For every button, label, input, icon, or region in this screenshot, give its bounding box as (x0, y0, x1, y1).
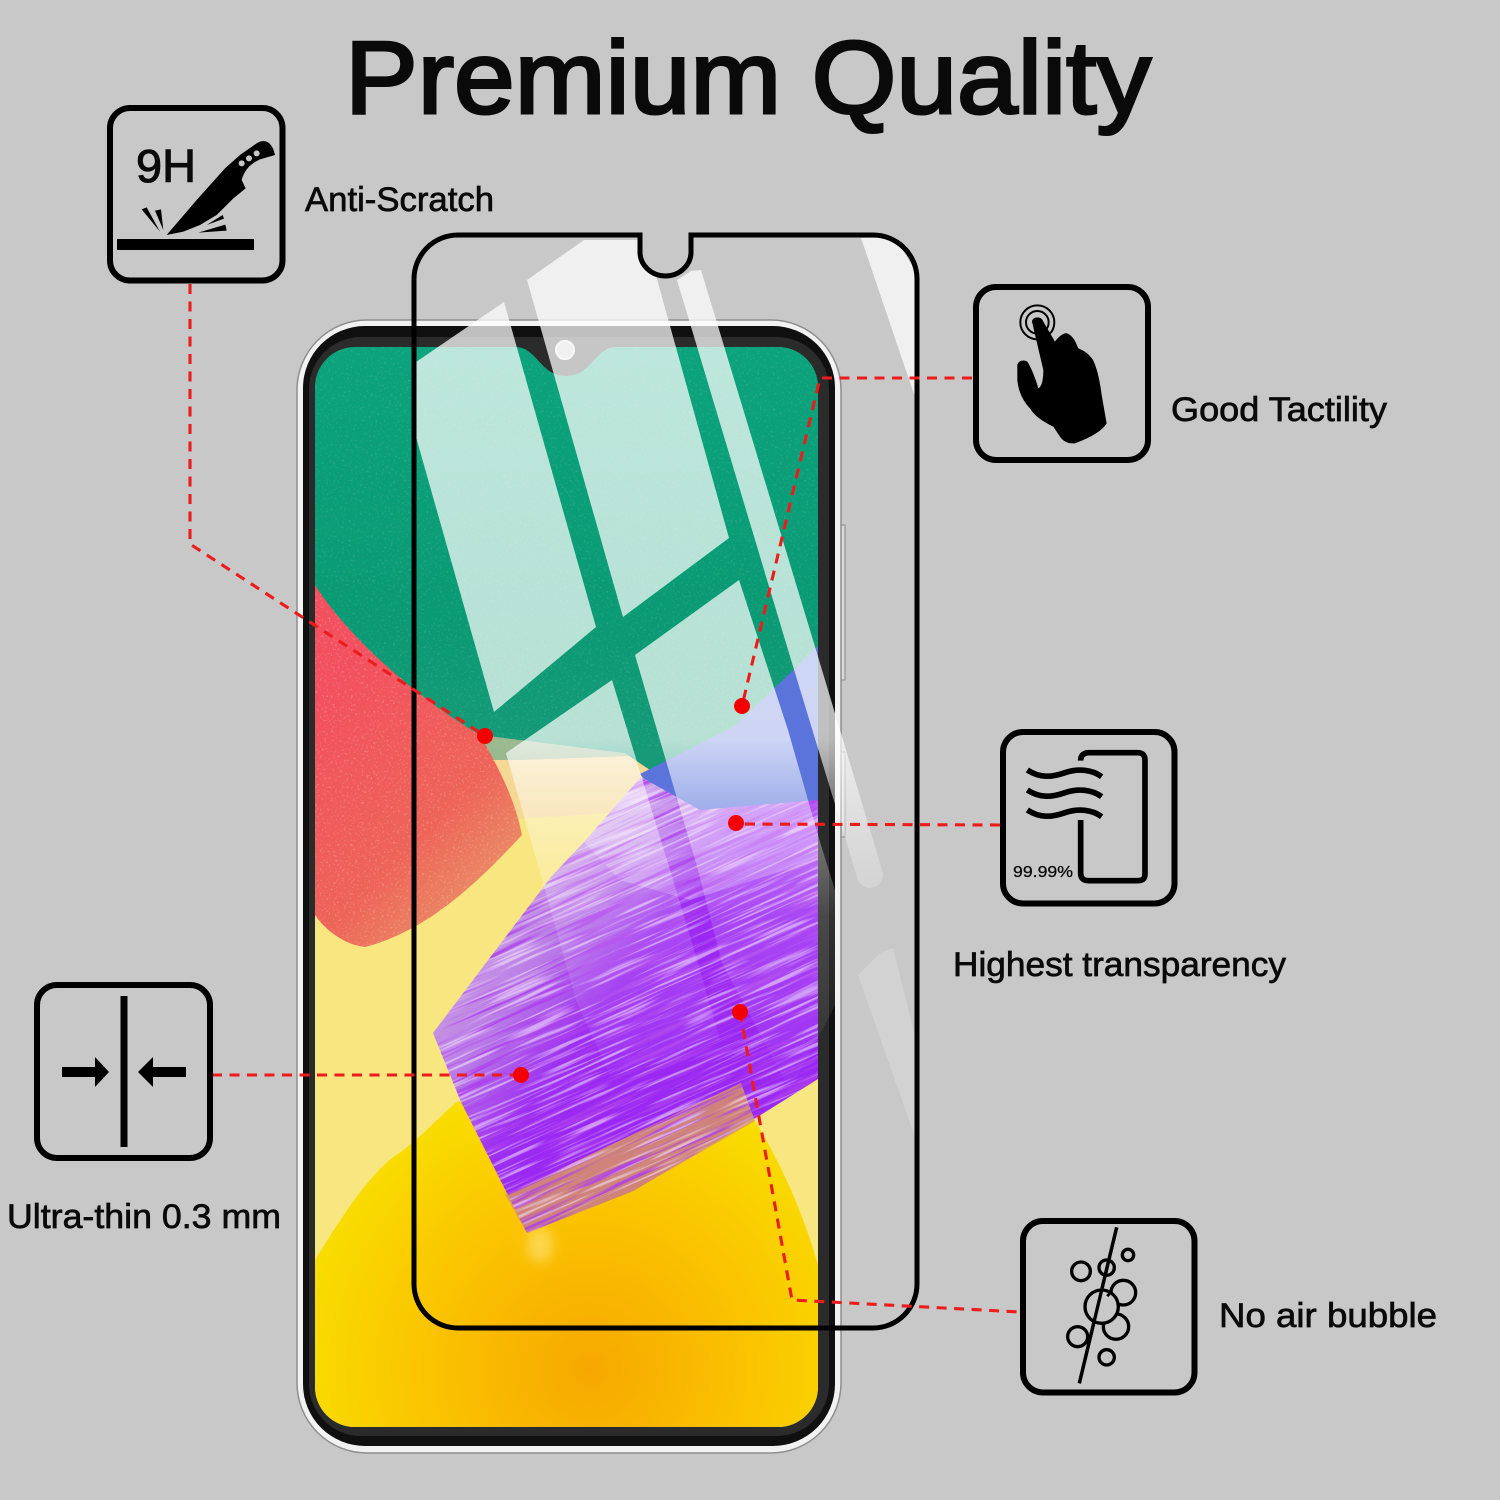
icon box (1023, 1221, 1194, 1392)
green lower patch (516, 347, 818, 770)
icon box (1003, 732, 1174, 904)
phone (296, 319, 846, 1454)
icon: phone and waves (1027, 753, 1145, 881)
reflection lower gray (858, 948, 916, 1140)
red callout lines (190, 284, 1020, 1312)
reflection band lower right (635, 580, 838, 1090)
purple orange fringe (505, 1083, 755, 1233)
icon: touch hand (1017, 305, 1107, 443)
bright yellow area (315, 1101, 818, 1427)
purple streaks (435, 779, 818, 1233)
label: Highest transparency (953, 946, 1286, 984)
reflection top right (861, 238, 916, 400)
icon: knife (142, 141, 275, 235)
icon box (37, 985, 210, 1158)
icon box (110, 108, 282, 280)
phone body frame (297, 320, 841, 1453)
panel: highest transparency (953, 732, 1286, 984)
panel: anti-scratch (110, 108, 494, 280)
label: Anti-Scratch (305, 181, 494, 219)
99.99% label: 99.99% (1013, 864, 1073, 881)
pale yellow area (315, 756, 818, 1427)
reflection band left (416, 302, 596, 712)
panel: good tactility (976, 287, 1387, 460)
selfie camera (556, 341, 574, 359)
green area (315, 347, 818, 760)
red callout dots (477, 698, 750, 1083)
lavender paint (640, 646, 818, 810)
green speckle texture (315, 347, 818, 747)
label: Good Tactility (1171, 391, 1387, 429)
red paint (315, 585, 522, 947)
9H label: 9H (136, 140, 196, 192)
phone bezel (303, 326, 835, 1446)
icon: thickness arrows (62, 996, 186, 1147)
purple upper pale wash (584, 777, 818, 900)
pale spot in yellow (527, 1227, 553, 1263)
tempered glass outline (414, 235, 917, 1328)
icon: bubbles (1068, 1227, 1136, 1383)
reflection band lower left (506, 680, 720, 1075)
glass reflections (416, 238, 916, 1140)
purple brush (433, 777, 818, 1233)
title: Premium Quality (345, 20, 1152, 135)
panel: ultra-thin (7, 985, 281, 1236)
reflection band thin (677, 270, 883, 888)
surface bar (117, 239, 254, 250)
reflection band top centre (527, 240, 729, 617)
label: No air bubble (1219, 1297, 1437, 1335)
label: Ultra-thin 0.3 mm (7, 1198, 281, 1236)
screen wallpaper (315, 347, 818, 1427)
phone side buttons (841, 525, 845, 837)
pale notch beside green (485, 736, 649, 819)
icon box (976, 287, 1148, 460)
red texture (315, 580, 525, 950)
panel: no air bubble (1023, 1221, 1437, 1392)
inner bezel ring (309, 337, 829, 1436)
